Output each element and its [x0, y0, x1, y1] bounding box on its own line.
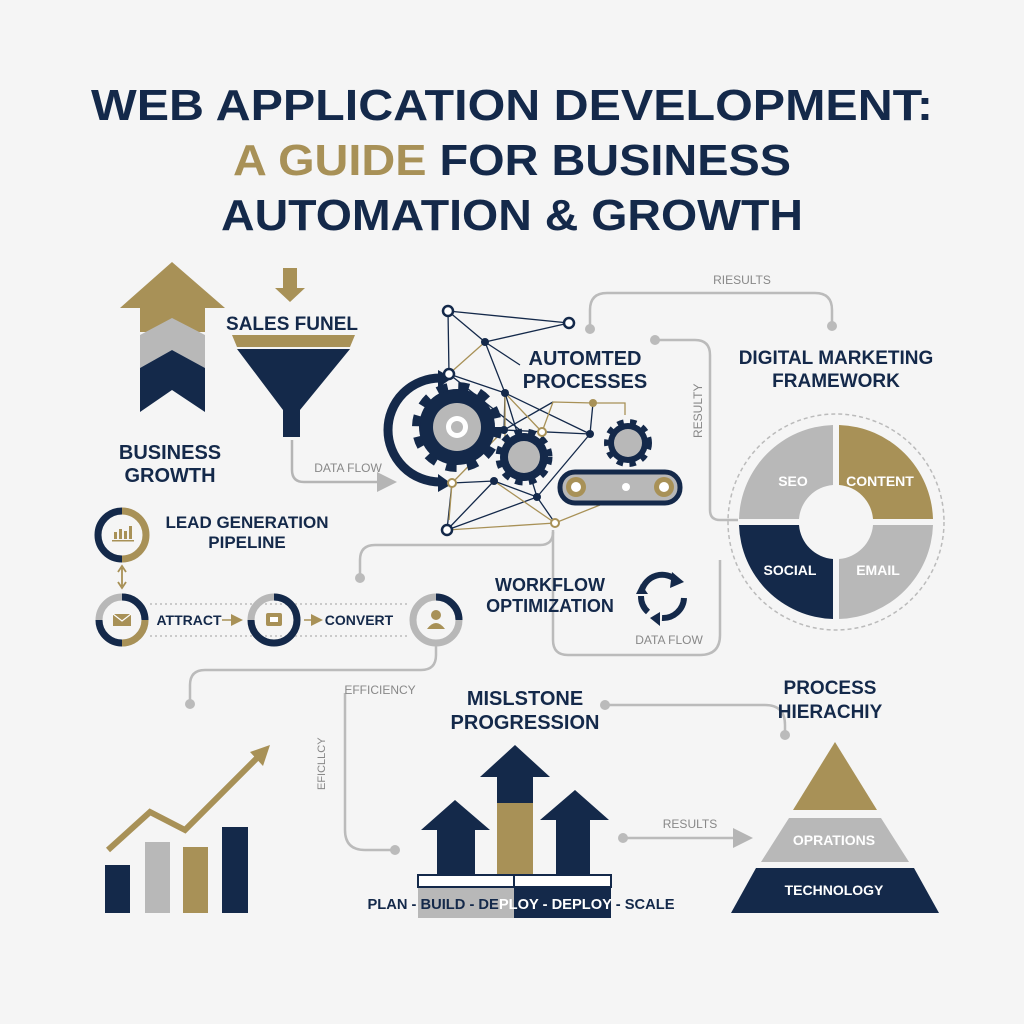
- arrow: results: [618, 817, 748, 843]
- icon: sales funnel: [232, 268, 355, 437]
- text: automated processes: AUTOMTED: [529, 348, 641, 370]
- connector: results side: RESULTY: [691, 384, 705, 438]
- heading: lead generation pipeline: LEAD GENERATION: [165, 513, 329, 532]
- text: business growth: [119, 442, 221, 487]
- connector: pipeline to chart: [185, 646, 436, 709]
- icon: business growth arrow: [120, 262, 225, 412]
- text: automated processes: [523, 348, 647, 393]
- heading: milestone progression: PROGRESSION: [451, 712, 599, 734]
- chart: marketing donut: CONTENT: [846, 473, 914, 489]
- icon: recycle arrows: [636, 572, 684, 626]
- connector: results side: [650, 335, 738, 520]
- heading: lead generation pipeline: PIPELINE: [208, 533, 286, 552]
- pipeline row: CONVERT: [325, 612, 394, 628]
- connector: pipeline to network: [355, 532, 553, 583]
- connector: results top: RIESULTS: [713, 273, 771, 287]
- connector: to process hierarchy: [600, 700, 790, 740]
- heading: digital marketing framework: FRAMEWORK: [772, 371, 900, 392]
- heading: digital marketing framework: [739, 348, 933, 392]
- conveyor: [560, 472, 680, 503]
- chart: marketing donut: [728, 414, 944, 630]
- heading: milestone progression: MISLSTONE: [467, 688, 583, 710]
- arrow: data flow: [292, 440, 392, 482]
- heading: process hierarchy: [778, 678, 883, 723]
- chart: growth bars: [105, 745, 270, 913]
- icon: lead gen chart ring: [98, 511, 146, 559]
- text: business growth: GROWTH: [124, 465, 216, 487]
- text: workflow optimization: OPTIMIZATION: [486, 596, 614, 616]
- title: [91, 81, 933, 240]
- arrow: results: RESULTS: [663, 817, 717, 831]
- chart: milestone arrows: [368, 745, 674, 918]
- connector: workflow data flow: [553, 530, 720, 655]
- arrow: vertical double: [118, 566, 126, 588]
- title: WEB APPLICATION DEVELOPMENT:: [91, 81, 933, 130]
- arrow: data flow: DATA FLOW: [314, 461, 382, 475]
- chart: pyramid: OPRATIONS: [793, 832, 875, 848]
- text: workflow optimization: [486, 575, 614, 616]
- chart: marketing donut: SEO: [778, 473, 808, 489]
- text: workflow optimization: WORKFLOW: [495, 575, 605, 595]
- text: automated processes: PROCESSES: [523, 371, 647, 393]
- title: A GUIDE FOR BUSINESS: [233, 136, 791, 185]
- chart: marketing donut: EMAIL: [856, 562, 900, 578]
- chart: pyramid: TECHNOLOGY: [785, 882, 884, 898]
- text: efficiency labels & connector: [316, 683, 416, 855]
- text: efficiency labels & connector: EFICLLCY: [316, 737, 328, 790]
- gears: [419, 389, 495, 465]
- network: automated processes: [388, 306, 680, 535]
- heading: lead generation pipeline: [165, 513, 329, 552]
- text: business growth: BUSINESS: [119, 442, 221, 464]
- chart: milestone arrows: PLAN - BUILD - DEPLOY - DEPLOY - SCALE: [368, 896, 674, 913]
- title: AUTOMATION & GROWTH: [221, 191, 803, 240]
- chart: pyramid: [731, 742, 939, 913]
- pipeline row: [99, 597, 459, 643]
- heading: digital marketing framework: DIGITAL MARKETING: [739, 348, 933, 369]
- chart: marketing donut: SOCIAL: [764, 562, 817, 578]
- heading: process hierarchy: HIERACHIY: [778, 702, 883, 723]
- connector: workflow data flow: DATA FLOW: [635, 633, 703, 647]
- text: sales funnel: SALES FUNEL: [226, 314, 358, 335]
- text: efficiency labels & connector: EFFICIENCY: [344, 683, 416, 697]
- heading: milestone progression: [451, 688, 599, 734]
- pipeline row: ATTRACT: [156, 612, 222, 628]
- circular arrow: [388, 378, 440, 482]
- connector: results top: [585, 273, 837, 334]
- heading: process hierarchy: PROCESS: [784, 678, 876, 699]
- nodes: [442, 306, 574, 535]
